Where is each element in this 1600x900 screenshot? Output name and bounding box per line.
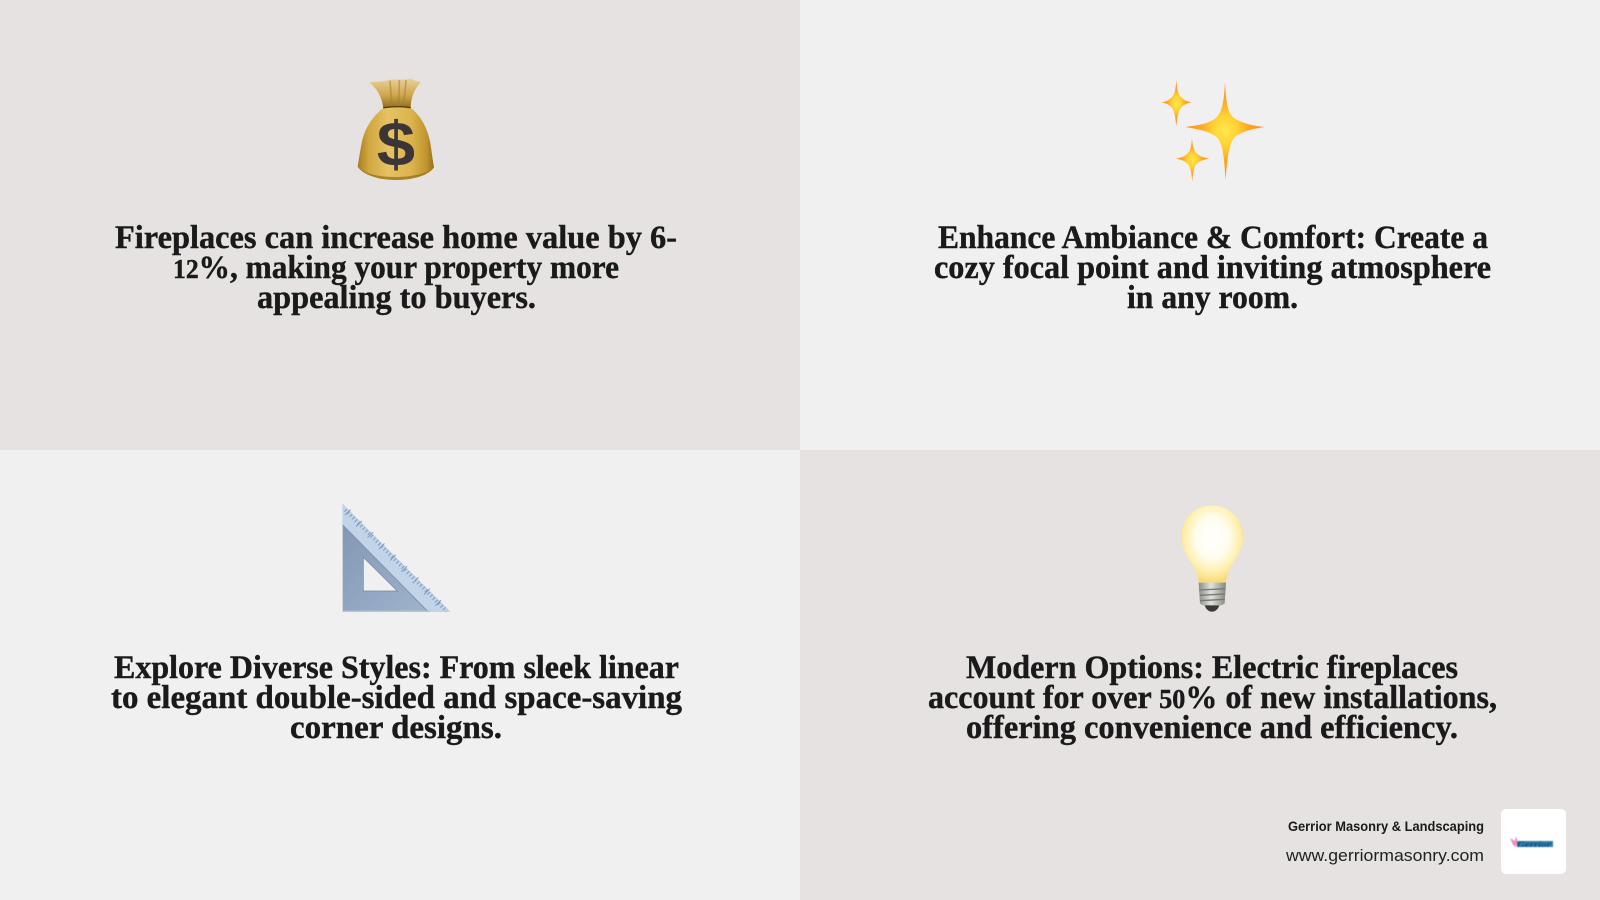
heading: ambiance [934, 220, 1491, 316]
heading: ambiance: in any room. [1127, 280, 1298, 316]
icon: money bag [358, 78, 434, 180]
heading: home value: Fireplaces can increase home value by 6- [115, 220, 677, 256]
heading: home value [115, 220, 677, 316]
footer: website: www.gerriormasonry.com [1285, 846, 1484, 865]
panel: ambiance [800, 0, 1600, 450]
heading: styles: to elegant double-sided and space-saving [111, 680, 682, 716]
heading: styles: corner designs. [290, 710, 502, 746]
heading: ambiance: cozy focal point and inviting atmosphere [934, 250, 1491, 286]
heading: ambiance: Enhance Ambiance & Comfort: Create a [938, 220, 1488, 256]
heading: home value: 12%, making your property more [173, 250, 619, 286]
panel: modern options [800, 450, 1600, 900]
icon: money bag: $ [377, 109, 415, 179]
heading: styles: Explore Diverse Styles: From sleek linear [114, 650, 679, 686]
icon: sparkles [1162, 80, 1265, 182]
heading: modern options: Modern Options: Electric fireplaces [966, 650, 1458, 686]
panel: home value [0, 0, 800, 450]
logo badge: Gerrior [1517, 840, 1552, 849]
icon: light bulb [1181, 505, 1243, 612]
logo badge [1501, 809, 1566, 874]
heading: modern options: offering convenience and efficiency. [966, 710, 1458, 746]
heading: modern options: account for over 50% of new installations, [928, 680, 1497, 716]
heading: modern options [928, 650, 1497, 746]
icon: triangle ruler [343, 504, 451, 612]
heading: home value: appealing to buyers. [257, 280, 536, 316]
heading: styles [111, 650, 682, 746]
footer: company name: Gerrior Masonry & Landscaping [1288, 819, 1484, 834]
panel: styles [0, 450, 800, 900]
